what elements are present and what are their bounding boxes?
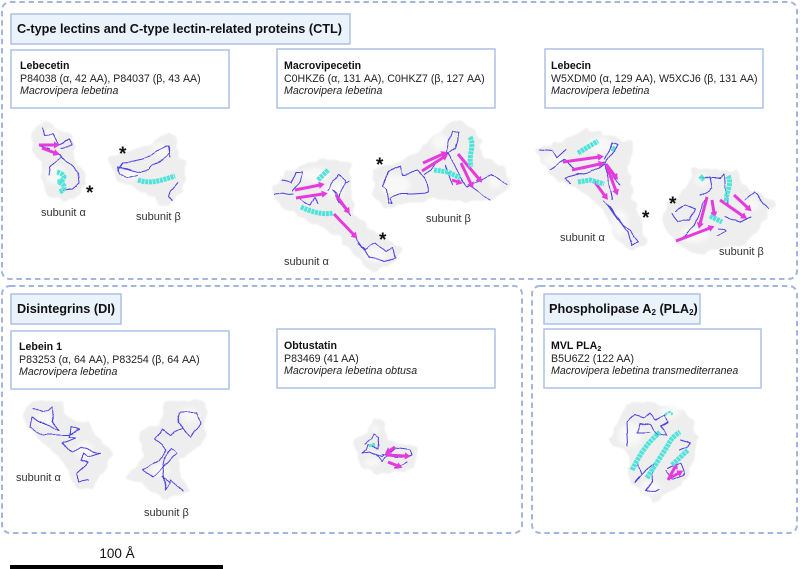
info box: MVL PLA2: MVL PLA [551,340,597,352]
panel: Disintegrins [2,286,522,533]
info box: Lebecin [545,49,763,108]
info box: Lebecetin: Macrovipera lebetina [20,85,118,97]
label: Macrovipecetin subunit beta: subunit β [426,213,471,225]
info box: Obtustatin: Obtustatin [284,340,337,352]
heading: PLA2 [544,294,700,324]
protein: Lebecetin subunit beta [112,135,181,203]
label: Macrovipecetin subunit alpha: subunit α [284,256,330,268]
info box: Lebecin: Macrovipera lebetina [551,85,649,97]
protein: Obtustatin [357,422,415,471]
asterisk: * [642,208,650,229]
info box: Lebein 1 [11,331,229,389]
panel: Phospholipase A2 [532,286,797,533]
heading: DI [11,294,121,324]
info box: MVL PLA2 [544,329,761,388]
info box: Lebein 1: Lebein 1 [19,341,62,353]
protein: Lebein 1 subunit alpha [27,404,111,485]
heading: PLA2: 2 [651,308,656,317]
label: Lebecin subunit alpha: subunit α [560,232,606,244]
info box: Lebecetin [11,50,229,108]
protein: Macrovipecetin subunit beta [377,122,508,205]
scale bar: 100 angstrom: 100 Å [99,546,135,561]
info box: Macrovipecetin: Macrovipecetin [284,60,361,72]
heading: CTL: C-type lectins and C-type lectin-related proteins (CTL) [17,22,342,36]
label: Lebecin subunit beta: subunit β [719,246,764,258]
heading: PLA2: 2 [689,308,694,317]
label: Lebecetin subunit beta: subunit β [136,211,181,223]
info box: Macrovipecetin: C0HKZ6 (α, 131 AA), C0HKZ7 (β, 127 AA) [284,73,485,85]
panel: C-type lectins and C-type lectin-related proteins [2,2,797,279]
heading: PLA2: Phospholipase A [549,302,651,316]
protein: Lebein 1 subunit beta [131,404,202,496]
protein: Lebecin subunit beta [665,172,771,251]
info box: Obtustatin: Macrovipera lebetina obtusa [284,365,417,377]
info box: Lebein 1: Macrovipera lebetina [19,366,117,378]
asterisk: * [379,230,387,251]
info box: MVL PLA2: B5U6Z2 (122 AA) [551,353,634,365]
info box: Macrovipecetin: Macrovipera lebetina [284,85,382,97]
info box: Lebecetin: P84038 (α, 42 AA), P84037 (β, 43 AA) [20,73,201,85]
info box: Obtustatin [277,329,495,388]
heading: PLA2: (PLA [656,302,689,316]
info box: MVL PLA2: 2 [597,346,601,353]
protein: Macrovipecetin subunit alpha [275,162,398,268]
asterisk: * [119,144,127,165]
info box: MVL PLA2: Macrovipera lebetina transmediterranea [551,365,738,377]
asterisk: * [669,194,677,215]
scale bar: 100 angstrom [10,546,223,569]
asterisk: * [86,183,94,204]
heading: CTL [11,14,350,44]
info box: Obtustatin: P83469 (41 AA) [284,353,359,365]
heading: DI: Disintegrins (DI) [17,302,115,316]
info box: Lebein 1: P83253 (α, 64 AA), P83254 (β, 64 AA) [19,354,200,366]
label: Lebein 1 subunit beta: subunit β [144,507,189,519]
asterisk: * [376,155,384,176]
info box: Lebecetin: Lebecetin [20,60,69,72]
heading: PLA2: ) [694,302,698,316]
info box: Lebecin: Lebecin [551,60,591,72]
protein: MVL PLA2 [614,404,695,498]
protein: Lebecin subunit alpha [539,132,643,248]
label: Lebein 1 subunit alpha: subunit α [16,472,62,484]
info box: Lebecin: W5XDM0 (α, 129 AA), W5XCJ6 (β, 131 AA) [551,73,758,85]
info box: Macrovipecetin [277,49,495,108]
label: Lebecetin subunit alpha: subunit α [41,207,87,219]
protein: Lebecetin subunit alpha [35,125,83,198]
